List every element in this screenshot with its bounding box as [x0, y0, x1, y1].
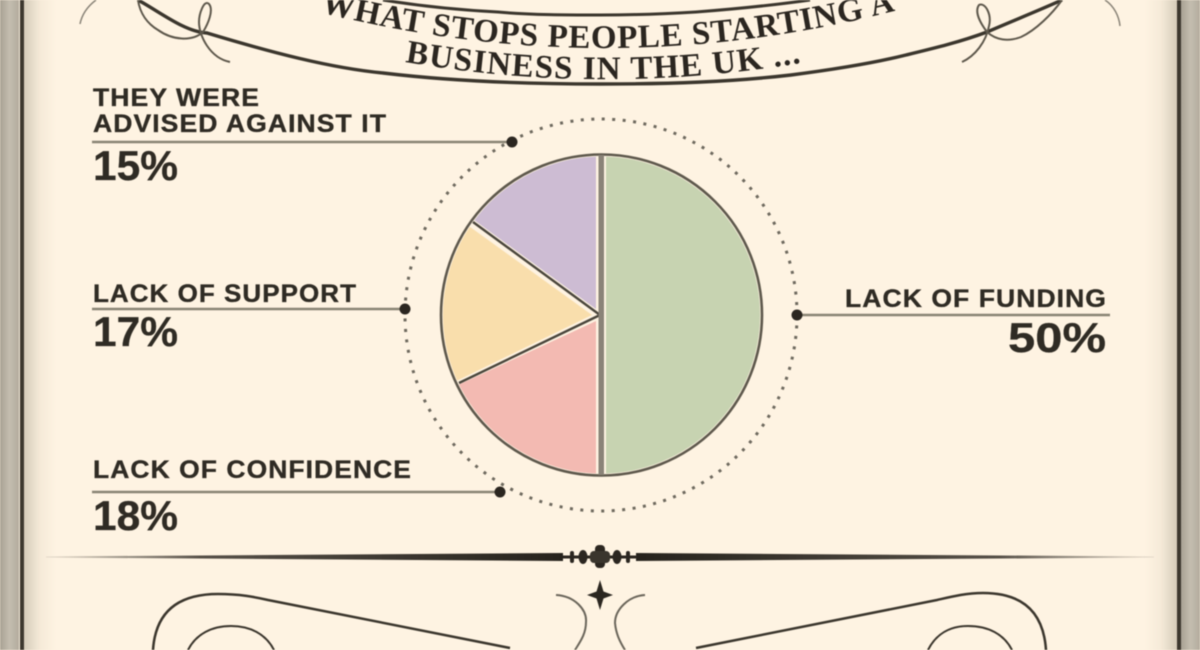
ribbon bow left outer arc — [80, 0, 96, 24]
lower ornamental banner — [153, 593, 1046, 650]
callout: advised against it — [92, 84, 518, 189]
ornamental divider — [46, 545, 1154, 568]
callout: lack of support: 17% — [93, 308, 178, 355]
pie slices — [440, 150, 776, 480]
callout: advised against it: 15% — [93, 142, 178, 189]
slice: lack of funding 50% — [606, 156, 760, 474]
pie chart — [405, 119, 797, 511]
slice: advised against it 15% — [470, 150, 596, 309]
callout: lack of support: LACK OF SUPPORT — [93, 280, 357, 308]
callout: lack of confidence: 18% — [93, 492, 178, 539]
slice: lack of confidence 18% — [459, 321, 596, 474]
title line 2: BUSINESS IN THE UK ... — [404, 40, 800, 80]
banner ribbon with title — [78, 0, 1122, 87]
ribbon bow right outer arc — [1105, 0, 1120, 26]
callout: lack of support — [92, 280, 410, 355]
callout: advised against it: THEY WERE — [93, 84, 260, 112]
callout: lack of confidence: LACK OF CONFIDENCE — [93, 456, 412, 484]
icon: diamond star ornament — [587, 580, 613, 610]
dotted outer ring — [405, 119, 797, 511]
callout: lack of funding — [792, 285, 1110, 361]
callout: lack of confidence — [92, 456, 506, 539]
callout: lack of funding: 50% — [1008, 314, 1106, 361]
ribbon bow right — [962, 0, 1062, 62]
callout: lack of funding: LACK OF FUNDING — [845, 285, 1107, 313]
ribbon bow left — [138, 0, 230, 62]
slice: lack of support 17% — [442, 226, 592, 381]
callout: advised against it: ADVISED AGAINST IT — [93, 110, 387, 138]
